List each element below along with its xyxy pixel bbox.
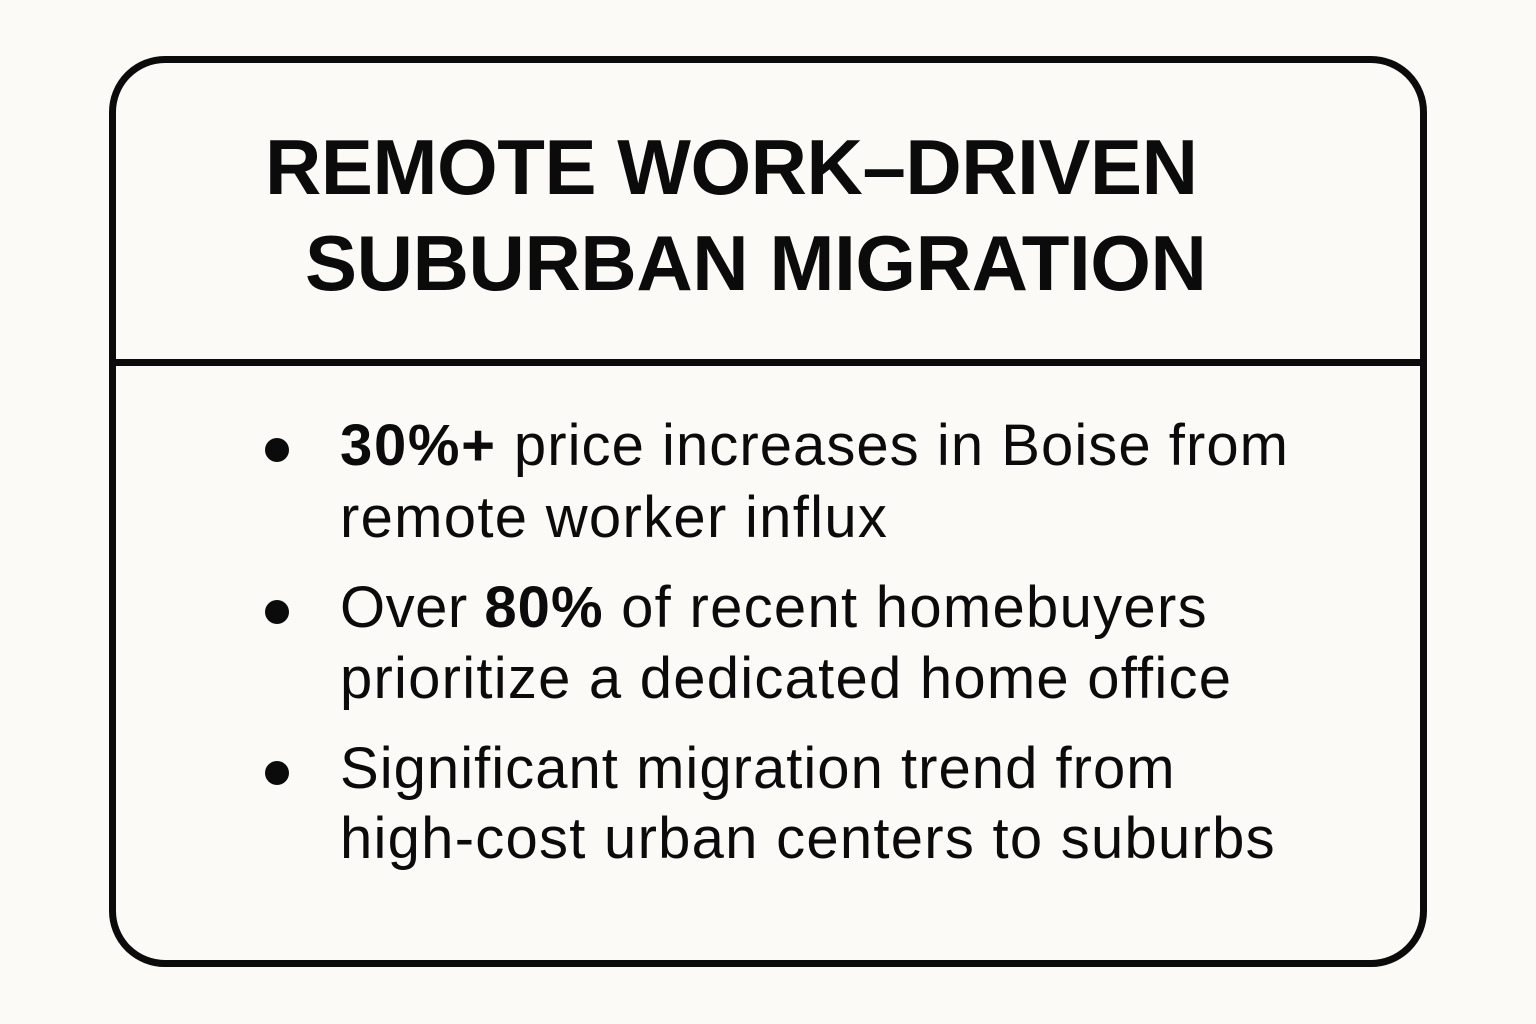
- bullet text 3: [340, 736, 1276, 871]
- bullet text 2: [340, 575, 1232, 711]
- panel: card: [109, 56, 1427, 967]
- title line 1: REMOTE WORK–DRIVEN: [265, 123, 1197, 211]
- bullet text 3: high-cost urban centers to suburbs: [340, 806, 1276, 871]
- bullet text 2: Over 80% of recent homebuyers: [340, 575, 1208, 640]
- bullet icon 1: [265, 438, 289, 462]
- title line 2: SUBURBAN MIGRATION: [305, 219, 1206, 307]
- bullet text 3: Significant migration trend from: [340, 736, 1176, 801]
- bullet text 1: [340, 413, 1289, 550]
- bullet text 2: prioritize a dedicated home office: [340, 646, 1232, 711]
- bullet text 1: remote worker influx: [340, 485, 888, 550]
- bullet text 1: 30%+ price increases in Boise from: [340, 413, 1289, 478]
- header divider: [112, 359, 1424, 366]
- bullet icon 2: [265, 600, 289, 624]
- bullet icon 3: [265, 761, 289, 785]
